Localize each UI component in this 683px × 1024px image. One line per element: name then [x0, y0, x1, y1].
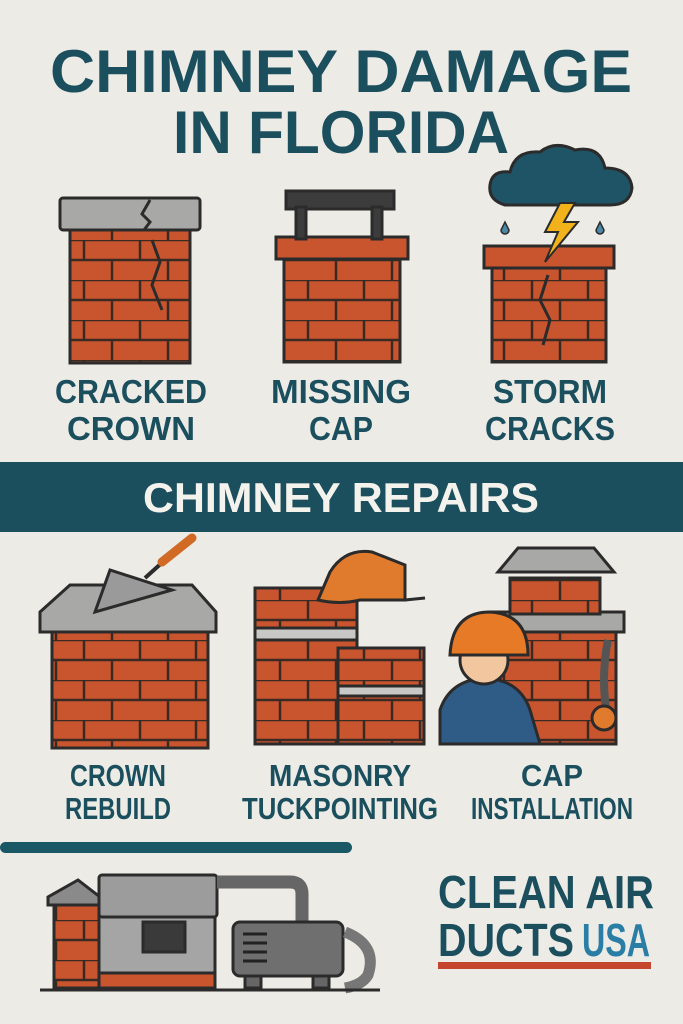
- logo: clean air ducts usa: DUCTS: [438, 914, 574, 966]
- label: missing cap: [271, 373, 411, 447]
- label: cap installation: [471, 758, 633, 826]
- label: cap installation: CAP: [521, 758, 583, 793]
- icon: cap installation: [440, 548, 624, 744]
- label: crown rebuild: REBUILD: [65, 791, 171, 826]
- icon: storm cracks chimney: [484, 145, 632, 362]
- icon: cracked crown chimney: [60, 198, 200, 363]
- label: crown rebuild: CROWN: [70, 758, 166, 793]
- label: masonry tuckpointing: TUCKPOINTING: [242, 791, 438, 826]
- label: cracked crown: CRACKED: [55, 373, 207, 410]
- label: cracked crown: CROWN: [67, 410, 195, 447]
- divider bar: [0, 842, 352, 853]
- title: [50, 38, 632, 166]
- label: missing cap: CAP: [309, 410, 373, 447]
- label: masonry tuckpointing: MASONRY: [269, 758, 411, 793]
- label: storm cracks: [485, 373, 615, 447]
- title: CHIMNEY DAMAGE: [50, 38, 632, 105]
- icon: duct cleaning machine: [40, 875, 380, 990]
- title: IN FLORIDA: [173, 99, 509, 166]
- banner: chimney repairs: CHIMNEY REPAIRS: [143, 474, 539, 521]
- label: storm cracks: CRACKS: [485, 410, 615, 447]
- label: crown rebuild: [65, 758, 171, 826]
- icon: missing cap chimney: [276, 191, 408, 362]
- label: storm cracks: STORM: [493, 373, 607, 410]
- label: missing cap: MISSING: [271, 373, 411, 410]
- logo: clean air ducts usa: USA: [582, 914, 650, 966]
- label: masonry tuckpointing: [242, 758, 438, 826]
- icon: crown rebuild: [40, 538, 216, 748]
- logo: clean air ducts usa: [438, 866, 654, 969]
- label: cracked crown: [55, 373, 207, 447]
- logo: clean air ducts usa: CLEAN AIR: [438, 866, 654, 918]
- banner: chimney repairs: [0, 462, 683, 532]
- icon: masonry tuckpointing: [255, 551, 425, 744]
